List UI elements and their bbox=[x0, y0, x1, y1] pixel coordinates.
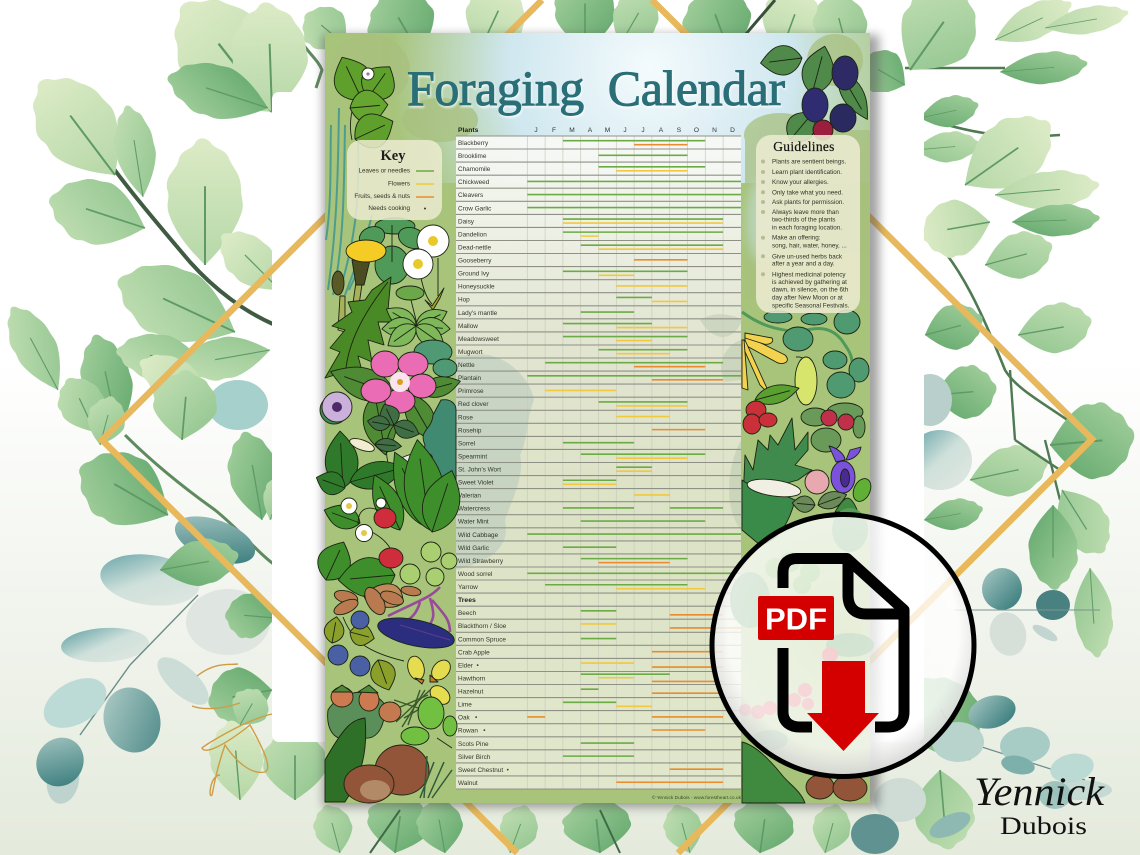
row: Walnut: Walnut bbox=[458, 780, 478, 787]
badge: PDF download bbox=[712, 514, 974, 776]
ivy sprig bbox=[366, 400, 422, 463]
guideline text: Give un-used herbs back bbox=[772, 253, 843, 260]
dandelion leaf bbox=[325, 277, 392, 378]
strawberry plant bbox=[311, 498, 403, 599]
row: Mugwort: Mugwort bbox=[458, 349, 483, 356]
guideline text: specific Seasonal Festivals. bbox=[772, 302, 850, 309]
row: Beech: Beech bbox=[458, 610, 477, 617]
glass disc bbox=[712, 514, 974, 776]
guideline text: Plants are sentient beings. bbox=[772, 158, 846, 166]
guideline text: Always leave more than bbox=[772, 209, 839, 216]
table header: F bbox=[552, 127, 556, 134]
row: Honeysuckle: Honeysuckle bbox=[458, 284, 495, 291]
guideline text: dawn, in silence, on the 6th bbox=[772, 287, 849, 294]
guidelines heading: Guidelines bbox=[773, 139, 835, 154]
poster base bbox=[325, 33, 870, 803]
honeysuckle bbox=[742, 333, 787, 395]
pine needles bbox=[420, 756, 452, 798]
table header: S bbox=[677, 127, 682, 134]
row: Blackberry: Blackberry bbox=[458, 140, 489, 147]
key: leaves: Leaves or needles bbox=[359, 168, 410, 174]
top strip bbox=[292, 0, 360, 63]
row: Crab Apple: Crab Apple bbox=[458, 649, 490, 656]
row: Water Mint: Water Mint bbox=[458, 519, 489, 526]
beech nuts bbox=[332, 584, 422, 618]
table header: D bbox=[730, 127, 735, 134]
row: Silver Birch: Silver Birch bbox=[458, 754, 491, 761]
row: Yarrow: Yarrow bbox=[458, 584, 478, 591]
ground ivy leaves bbox=[356, 218, 429, 284]
row: Meadowsweet: Meadowsweet bbox=[458, 336, 499, 343]
row: Rose: Rose bbox=[458, 414, 473, 421]
sky wash bbox=[325, 33, 870, 183]
guidelines panel bbox=[756, 135, 860, 313]
row: Chamomile: Chamomile bbox=[458, 166, 491, 173]
row: Elder: Elder • bbox=[458, 662, 479, 669]
row: Ground Ivy: Ground Ivy bbox=[458, 271, 490, 278]
row: Plantain: Plantain bbox=[458, 375, 482, 382]
illustration: grass blades bbox=[326, 108, 375, 295]
guideline text: Make an offering: bbox=[772, 235, 821, 242]
right lower bbox=[891, 660, 1001, 778]
valerian bbox=[746, 476, 802, 500]
rowan berries under badge bbox=[739, 647, 838, 719]
oak leaf bottom bbox=[742, 742, 805, 803]
clover bbox=[792, 470, 849, 513]
table header: A bbox=[588, 127, 593, 134]
guideline text: Learn plant identification. bbox=[772, 169, 842, 176]
violet bbox=[829, 446, 861, 493]
row: Trees heading: Trees bbox=[458, 597, 476, 604]
hop leaves bbox=[400, 542, 457, 586]
acanthus leaf bbox=[743, 418, 812, 500]
row: Lime: Lime bbox=[458, 702, 472, 709]
table: monthly foraging calendar bbox=[456, 127, 742, 789]
catkins bbox=[405, 654, 454, 708]
key panel bbox=[347, 140, 442, 220]
vine and leaves bbox=[742, 310, 869, 398]
row: Rosehip: Rosehip bbox=[458, 427, 482, 434]
guideline text: Highest medicinal potency bbox=[772, 271, 846, 278]
guideline bullets bbox=[761, 160, 765, 276]
illustrations: left column plants bbox=[311, 218, 469, 803]
oak silhouette teal bbox=[423, 400, 456, 495]
row: Valerian: Valerian bbox=[458, 493, 481, 500]
row: Watercress: Watercress bbox=[458, 506, 490, 513]
daisies bbox=[403, 225, 449, 310]
gooseberry bbox=[801, 403, 865, 452]
row: Spearmint: Spearmint bbox=[458, 453, 487, 460]
row: Dandelion: Dandelion bbox=[458, 231, 487, 238]
row: Blackthorn / Sloe: Blackthorn / Sloe bbox=[458, 623, 507, 630]
row rules bbox=[456, 136, 741, 789]
table header: J bbox=[623, 127, 627, 134]
table header: N bbox=[712, 127, 717, 134]
row: Scots Pine: Scots Pine bbox=[458, 741, 489, 748]
illustration: blackberries bbox=[759, 42, 877, 149]
signature name: Yennick bbox=[974, 769, 1105, 814]
right upper bbox=[905, 68, 1100, 445]
dandelion bbox=[332, 240, 386, 332]
poster shadow bbox=[323, 35, 879, 807]
guideline text: Know your allergies. bbox=[772, 179, 829, 186]
PDF label bbox=[758, 596, 834, 640]
row: Primrose: Primrose bbox=[458, 388, 484, 395]
table background bbox=[456, 136, 741, 789]
illustration: goosegrass vine bbox=[325, 49, 404, 155]
key: fruits: Fruits, seeds & nuts bbox=[354, 193, 410, 200]
violet leaves bbox=[835, 476, 874, 512]
ghost leaves bbox=[700, 314, 742, 530]
row: Mallow: Mallow bbox=[458, 323, 478, 330]
row: Cleavers: Cleavers bbox=[458, 192, 483, 199]
key heading: Key bbox=[381, 148, 406, 164]
leaves under badge bbox=[730, 508, 874, 750]
ghost oak leaf bbox=[456, 354, 534, 570]
row: Common Spruce: Common Spruce bbox=[458, 636, 506, 643]
guideline text: Ask plants for permission. bbox=[772, 199, 844, 206]
umbel bbox=[392, 449, 434, 475]
row: Rowan: Rowan • bbox=[458, 728, 485, 735]
row: St. John's Wort: St. John's Wort bbox=[458, 466, 501, 474]
table header bbox=[458, 127, 735, 134]
title: Foraging Calendar bbox=[407, 60, 785, 116]
month gridlines bbox=[527, 136, 723, 789]
key: flowers: Flowers bbox=[388, 180, 410, 188]
document icon bbox=[783, 558, 904, 727]
hazel cluster bbox=[328, 685, 401, 739]
row: Red clover: Red clover bbox=[458, 401, 489, 408]
row: Oak: Oak • bbox=[458, 715, 477, 722]
chestnuts bbox=[344, 745, 429, 803]
guideline text: is achieved by gathering at bbox=[772, 279, 847, 286]
row: Gooseberry: Gooseberry bbox=[458, 258, 492, 265]
row: Wood sorrel: Wood sorrel bbox=[458, 571, 492, 578]
table header: M bbox=[605, 127, 610, 134]
lime leaves bbox=[401, 697, 457, 748]
guideline text: two-thirds of the plants bbox=[772, 217, 835, 224]
rose leaves bbox=[325, 357, 463, 458]
hop cone bbox=[795, 357, 817, 405]
guideline text: Only take what you need. bbox=[772, 189, 843, 196]
guideline text: day after New Moon or at bbox=[772, 295, 843, 302]
copyright line: © Yennick Dubois - www.forestheart.co.uk bbox=[652, 794, 742, 801]
table header: Plants bbox=[458, 127, 479, 134]
PDF label: PDF bbox=[765, 602, 827, 636]
elderberries bbox=[375, 587, 457, 654]
signature bbox=[974, 769, 1105, 840]
download arrow bbox=[807, 661, 879, 751]
row: Crow Garlic: Crow Garlic bbox=[458, 205, 492, 212]
table header: A bbox=[659, 127, 664, 134]
row: Chickweed: Chickweed bbox=[458, 179, 490, 186]
row: Wild Cabbage: Wild Cabbage bbox=[458, 532, 499, 539]
shamrock under badge bbox=[765, 552, 820, 594]
lady's mantle bbox=[381, 286, 451, 354]
table header: J bbox=[641, 127, 645, 134]
lower dark leaf bbox=[742, 480, 795, 545]
row: Hawthorn: Hawthorn bbox=[458, 675, 486, 682]
row: Dead-nettle: Dead-nettle bbox=[458, 244, 491, 251]
signature surname: Dubois bbox=[1000, 813, 1087, 840]
wild garlic leaves bbox=[362, 437, 469, 538]
row: Nettle: Nettle bbox=[458, 362, 475, 369]
chestnuts bottom bbox=[806, 775, 867, 801]
table header: O bbox=[694, 127, 699, 134]
row: Sorrel: Sorrel bbox=[458, 440, 475, 447]
guideline text: after a year and a day. bbox=[772, 261, 835, 268]
purple mallow flower bbox=[320, 392, 352, 424]
row: Wild Strawberry: Wild Strawberry bbox=[458, 558, 504, 565]
row: Sweet Violet: Sweet Violet bbox=[458, 480, 494, 487]
key: needs cooking: Needs cooking bbox=[368, 205, 410, 212]
sloes bbox=[322, 611, 404, 694]
guideline text bbox=[772, 158, 850, 309]
row: Hazelnut: Hazelnut bbox=[458, 689, 483, 696]
bottom strip bbox=[363, 789, 435, 855]
row: Hop: Hop bbox=[458, 297, 470, 304]
sky foliage wash bbox=[330, 34, 870, 300]
guideline text: in each foraging location. bbox=[772, 225, 842, 232]
plantain leaves bbox=[313, 430, 408, 499]
mallow leaves bbox=[414, 340, 457, 377]
row: Lady's mantle: Lady's mantle bbox=[458, 310, 498, 317]
yew sprig bbox=[394, 690, 435, 727]
row: Sweet Chestnut: Sweet Chestnut • bbox=[458, 767, 509, 774]
table header: M bbox=[569, 127, 575, 134]
poster: Foraging Calendar bbox=[311, 33, 877, 803]
illustrations: right column plants bbox=[730, 310, 874, 803]
chestnut leaf bbox=[325, 718, 366, 802]
guideline text: song, hair, water, honey, ... bbox=[772, 243, 847, 250]
white centre panel bbox=[272, 92, 924, 742]
rose flower bbox=[361, 351, 436, 413]
row: Wild Garlic: Wild Garlic bbox=[458, 545, 490, 552]
table header: J bbox=[534, 127, 538, 134]
red rose hips bbox=[743, 380, 801, 434]
row: Brooklime: Brooklime bbox=[458, 153, 487, 160]
row: Daisy: Daisy bbox=[458, 218, 475, 225]
